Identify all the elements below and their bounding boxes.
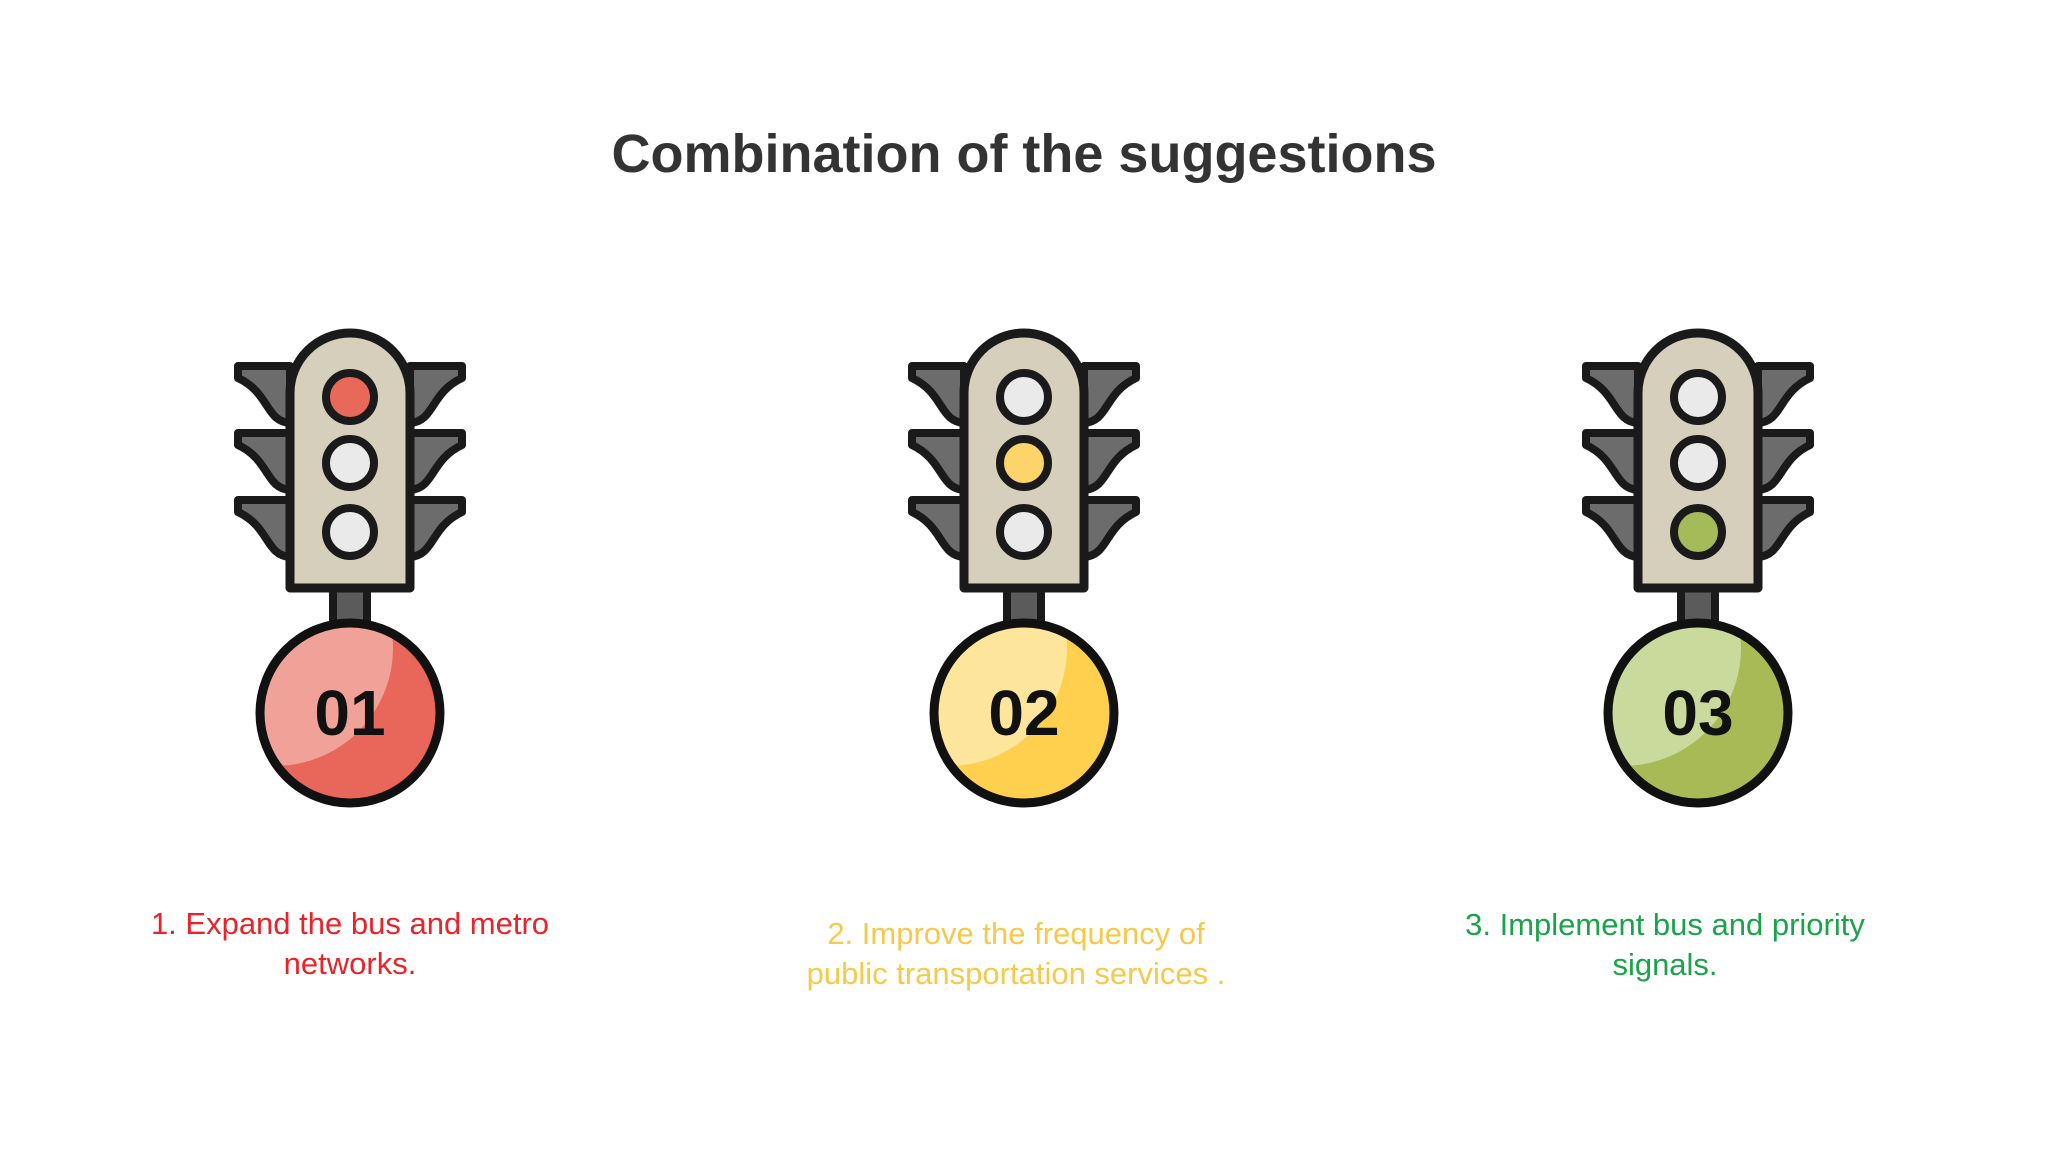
label 2: 2. Improve the frequency of bbox=[827, 916, 1205, 951]
number badge 01: 01 bbox=[314, 677, 386, 749]
number badge 02 bbox=[930, 618, 1118, 808]
traffic light 3 bbox=[1582, 328, 1814, 808]
label 3 bbox=[1465, 907, 1865, 982]
traffic light 1 bbox=[234, 328, 466, 808]
number badge 03 bbox=[1604, 618, 1792, 808]
label 3: signals. bbox=[1612, 947, 1718, 982]
label 3: 3. Implement bus and priority bbox=[1465, 907, 1865, 942]
traffic light 2 bbox=[908, 328, 1140, 808]
label 2 bbox=[807, 916, 1225, 991]
number badge 02: 02 bbox=[988, 677, 1060, 749]
label 1 bbox=[151, 906, 549, 981]
label 2: public transportation services . bbox=[807, 956, 1225, 991]
label 1: 1. Expand the bus and metro bbox=[151, 906, 549, 941]
number badge 01 bbox=[256, 618, 444, 808]
title: Combination of the suggestions bbox=[612, 124, 1436, 184]
number badge 03: 03 bbox=[1662, 677, 1734, 749]
label 1: networks. bbox=[284, 946, 416, 981]
